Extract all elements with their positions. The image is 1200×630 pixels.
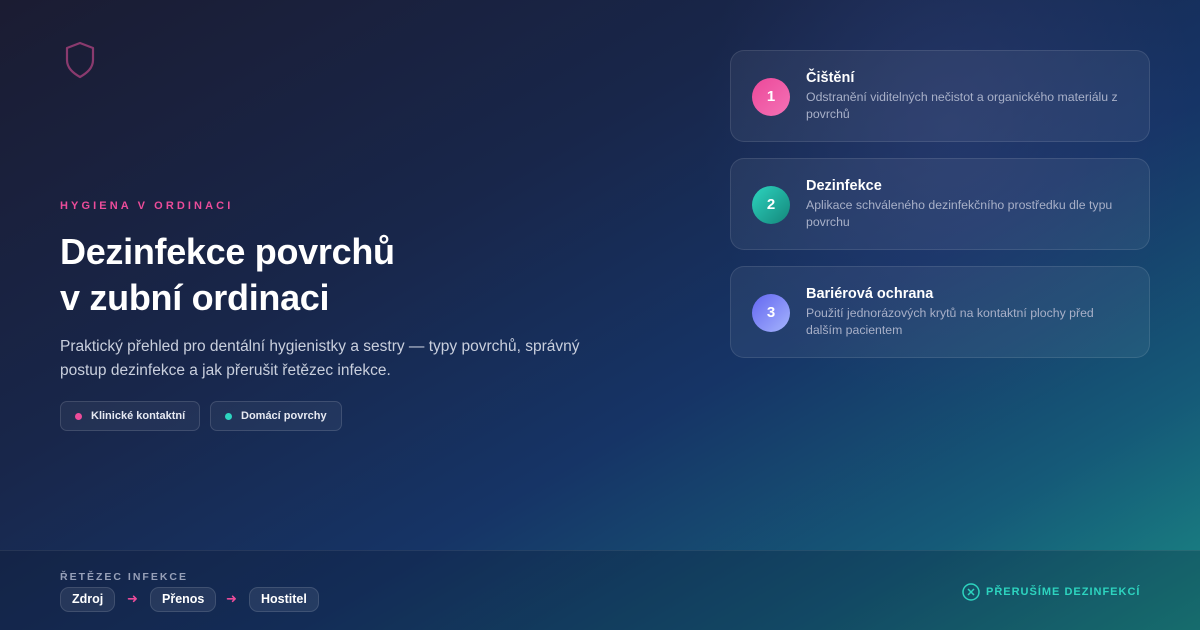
badge 2: 2: [767, 196, 775, 213]
badge 1: [752, 78, 790, 116]
eyebrow: HYGIENA V ORDINACI: [60, 200, 233, 212]
footer: chain of infection: [0, 550, 1200, 630]
tag: home: [210, 401, 342, 431]
card 2: [730, 158, 1150, 250]
footer: chain of infection: ➜: [226, 591, 237, 606]
card 2: Aplikace schváleného dezinfekčního prostředku dle typu povrchu: [806, 198, 1112, 229]
tag: clinical: [60, 401, 200, 431]
badge 1: 1: [767, 88, 775, 105]
footer: chain of infection: Přenos: [162, 592, 204, 606]
title: [60, 231, 395, 318]
card 3: Bariérová ochrana: [806, 286, 933, 302]
badge 3: 3: [767, 304, 775, 321]
footer: chain of infection: ➜: [127, 591, 138, 606]
card 3: Použití jednorázových krytů na kontaktní plochy před dalším pacientem: [806, 306, 1094, 337]
card 1: [730, 50, 1150, 142]
card 2: Dezinfekce: [806, 178, 882, 194]
callout: interrupt: [962, 583, 1140, 601]
badge 2: [752, 186, 790, 224]
tag: clinical: Klinické kontaktní: [91, 410, 185, 422]
callout: interrupt: PŘERUŠÍME DEZINFEKCÍ: [986, 586, 1140, 598]
footer: chain of infection: Hostitel: [261, 592, 307, 606]
card 1: Čištění: [806, 70, 854, 86]
title: Dezinfekce povrchů: [60, 231, 395, 272]
tag: home: Domácí povrchy: [241, 410, 327, 422]
footer: chain of infection: ŘETĚZEC INFEKCE: [60, 571, 188, 583]
card 3: [730, 266, 1150, 358]
title: v zubní ordinaci: [60, 277, 329, 318]
subtitle: Praktický přehled pro dentální hygienistky a sestry — typy povrchů, správný postup dezinfekce a jak přerušit řetězec infekce.: [60, 338, 580, 379]
card 1: Odstranění viditelných nečistot a organického materiálu z povrchů: [806, 90, 1118, 121]
footer: chain of infection: Zdroj: [72, 592, 103, 606]
badge 3: [752, 294, 790, 332]
icon: shield: [66, 42, 94, 78]
